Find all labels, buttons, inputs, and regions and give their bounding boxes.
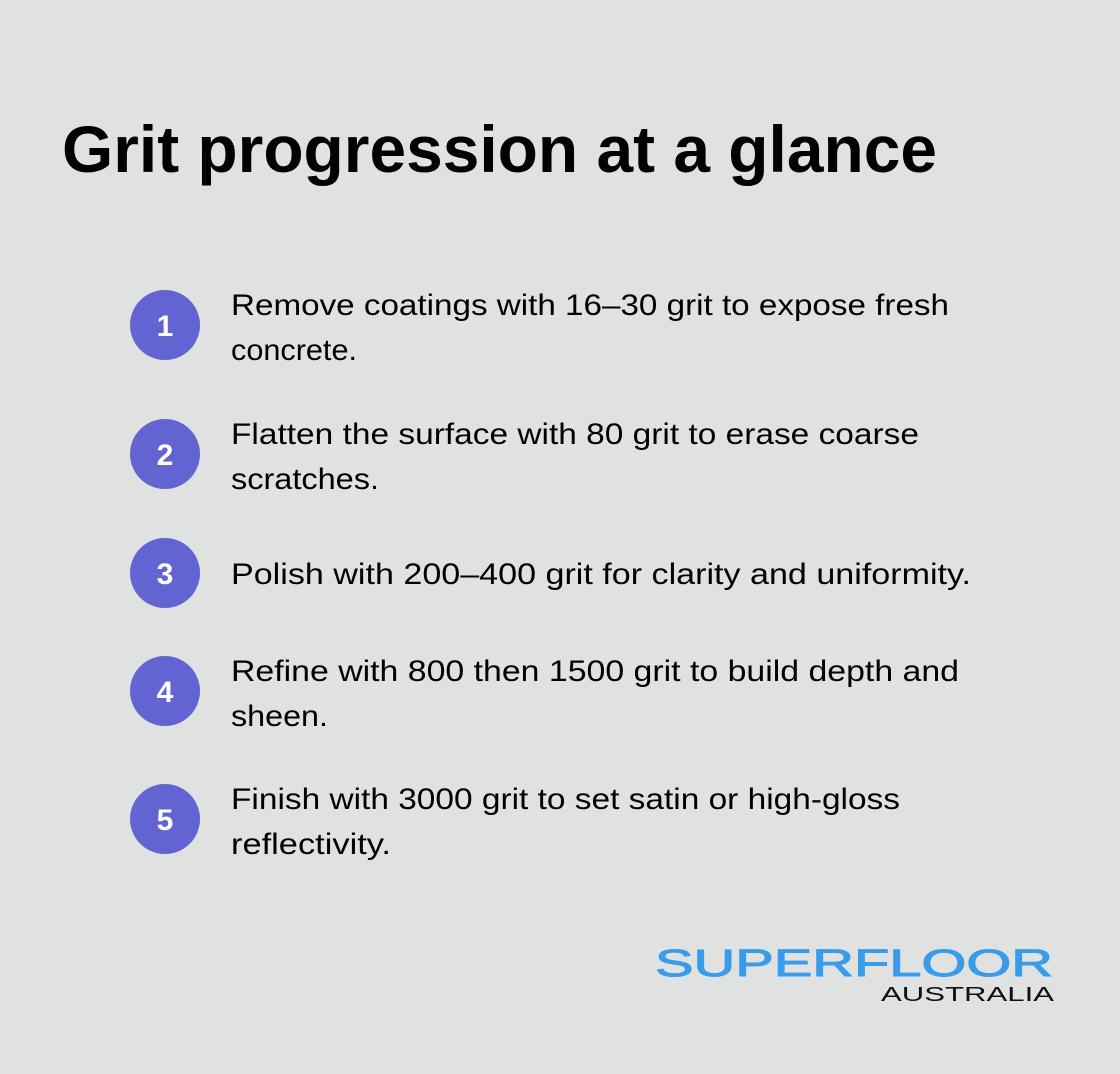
text: step 1: concrete. xyxy=(231,334,357,367)
icon: number 1: 1 xyxy=(157,310,173,343)
icon: number 5 xyxy=(130,784,200,854)
text: step 2: scratches. xyxy=(231,463,379,496)
text: step 3: Polish with 200–400 grit for clarity and uniformity. xyxy=(231,558,971,591)
text: step 2 xyxy=(231,418,919,496)
icon: number 4: 4 xyxy=(157,676,174,709)
icon: number 3 xyxy=(130,538,200,608)
step 1 xyxy=(130,289,949,367)
text: step 1 xyxy=(231,289,949,367)
logo: SUPERFLOOR xyxy=(655,943,1053,985)
icon: number 4 xyxy=(130,656,200,726)
text: step 1: Remove coatings with 16–30 grit to expose fresh xyxy=(231,289,949,322)
logo: AUSTRALIA xyxy=(881,984,1055,1006)
step 2 xyxy=(130,418,919,496)
logo xyxy=(655,943,1055,1006)
icon: number 2: 2 xyxy=(157,439,173,472)
icon: number 5: 5 xyxy=(157,804,173,837)
step 4 xyxy=(130,655,959,733)
text: step 5 xyxy=(231,783,900,861)
text: step 2: Flatten the surface with 80 grit to erase coarse xyxy=(231,418,919,451)
text: step 4: Refine with 800 then 1500 grit to build depth and xyxy=(231,655,959,688)
icon: number 3: 3 xyxy=(157,558,173,591)
text: step 4: sheen. xyxy=(231,700,328,733)
text: step 5: reflectivity. xyxy=(231,828,391,861)
step 5 xyxy=(130,783,900,861)
icon: number 1 xyxy=(130,290,200,360)
text: step 5: Finish with 3000 grit to set satin or high-gloss xyxy=(231,783,900,816)
icon: number 2 xyxy=(130,419,200,489)
step 3 xyxy=(130,538,971,608)
title: Grit progression at a glance xyxy=(62,112,937,186)
text: step 4 xyxy=(231,655,959,733)
